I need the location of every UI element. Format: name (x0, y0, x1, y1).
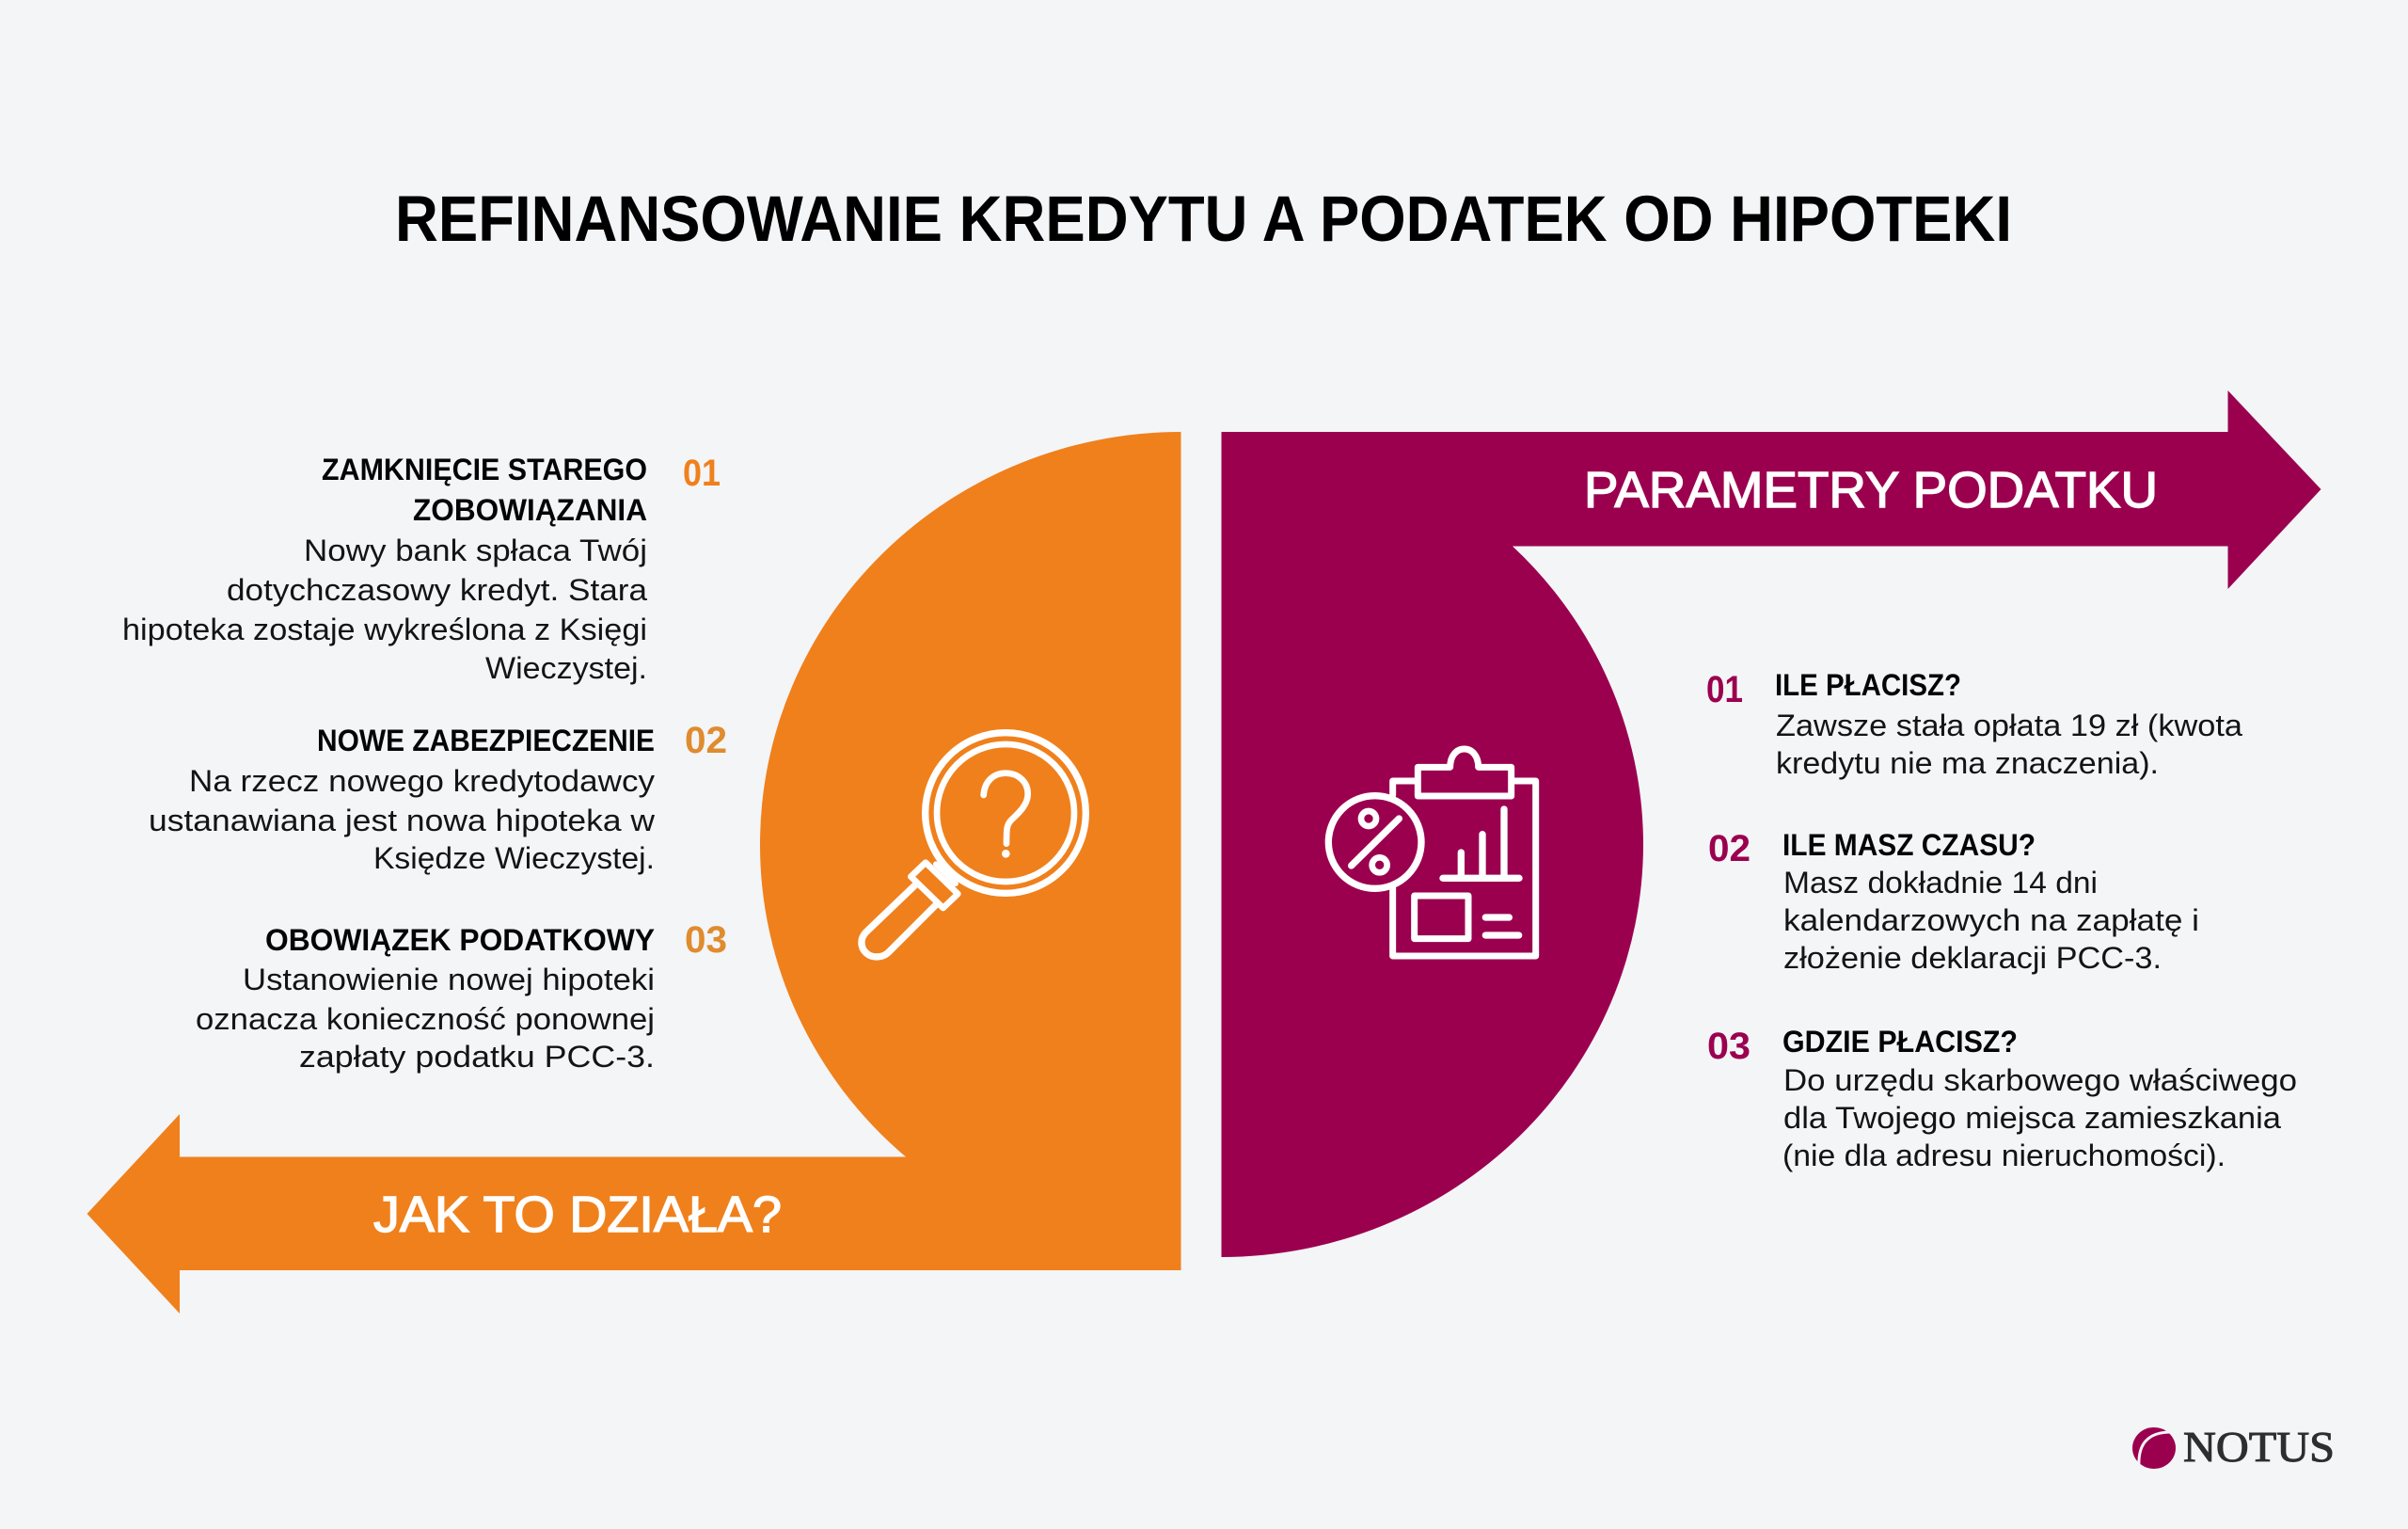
text block: left item 02: Na rzecz nowego kredytodawcy (189, 764, 655, 798)
text block: right item 03: Do urzędu skarbowego właściwego (1783, 1063, 2297, 1097)
text block: right item 01: Zawsze stała opłata 19 zł (kwota (1776, 709, 2242, 742)
text block: right item 01 (1706, 668, 2242, 780)
panel: orange half circle with left arrow (87, 432, 1181, 1314)
text block: left item 01: Nowy bank spłaca Twój (304, 534, 647, 567)
text block: right item 02: Masz dokładnie 14 dni (1783, 866, 2098, 900)
text block: left item 02: NOWE ZABEZPIECZENIE (317, 724, 655, 757)
text block: left item 01: ZAMKNIĘCIE STAREGO (322, 453, 647, 486)
heading: jak to działa: JAK TO DZIAŁA? (373, 1187, 782, 1243)
text block: right item 03 (1707, 1025, 2297, 1172)
number 02: 02 (685, 720, 727, 761)
text block: left item 03: zapłaty podatku PCC-3. (299, 1040, 655, 1074)
number 01: 01 (1706, 669, 1743, 710)
icon: magnifying glass with question mark (862, 733, 1085, 957)
panel: purple half circle with right arrow (1221, 390, 2321, 1257)
text block: right item 03: (nie dla adresu nieruchomości). (1782, 1139, 2226, 1172)
number 01: 01 (683, 453, 721, 494)
text block: right item 02: złożenie deklaracji PCC-3. (1783, 941, 2162, 975)
logo: Notus: NOTUS (2183, 1423, 2335, 1471)
title: REFINANSOWANIE KREDYTU A PODATEK OD HIPOTEKI (395, 183, 2012, 255)
text block: right item 03: dla Twojego miejsca zamieszkania (1783, 1101, 2281, 1135)
text block: left item 03: Ustanowienie nowej hipoteki (243, 963, 655, 996)
text block: left item 02: Księdze Wieczystej. (373, 841, 655, 875)
number 03: 03 (685, 919, 727, 961)
text block: left item 01: hipoteka zostaje wykreślona z Księgi (122, 613, 647, 646)
text block: left item 02 (149, 720, 727, 875)
text block: left item 03: oznacza konieczność ponownej (196, 1002, 655, 1036)
text block: left item 03: OBOWIĄZEK PODATKOWY (265, 923, 655, 957)
text block: right item 01: ILE PŁACISZ? (1775, 668, 1961, 702)
text block: left item 02: ustanawiana jest nowa hipoteka w (149, 804, 656, 837)
text block: left item 01: Wieczystej. (485, 651, 647, 685)
number 03: 03 (1707, 1026, 1751, 1067)
text block: right item 02: ILE MASZ CZASU? (1782, 828, 2036, 862)
text block: left item 01 (122, 453, 721, 685)
number 02: 02 (1708, 828, 1751, 869)
text block: right item 02 (1708, 828, 2199, 975)
text block: left item 01: ZOBOWIĄZANIA (413, 493, 647, 527)
text block: left item 01: dotychczasowy kredyt. Stara (227, 573, 647, 607)
heading: parametry podatku: PARAMETRY PODATKU (1584, 462, 2158, 518)
icon: clipboard with chart and percent (1328, 749, 1536, 956)
icon: logo mark (2132, 1427, 2176, 1469)
text block: left item 03 (196, 919, 727, 1074)
text block: right item 03: GDZIE PŁACISZ? (1782, 1025, 2018, 1059)
text block: right item 02: kalendarzowych na zapłatę i (1783, 903, 2199, 937)
text block: right item 01: kredytu nie ma znaczenia). (1776, 746, 2159, 780)
